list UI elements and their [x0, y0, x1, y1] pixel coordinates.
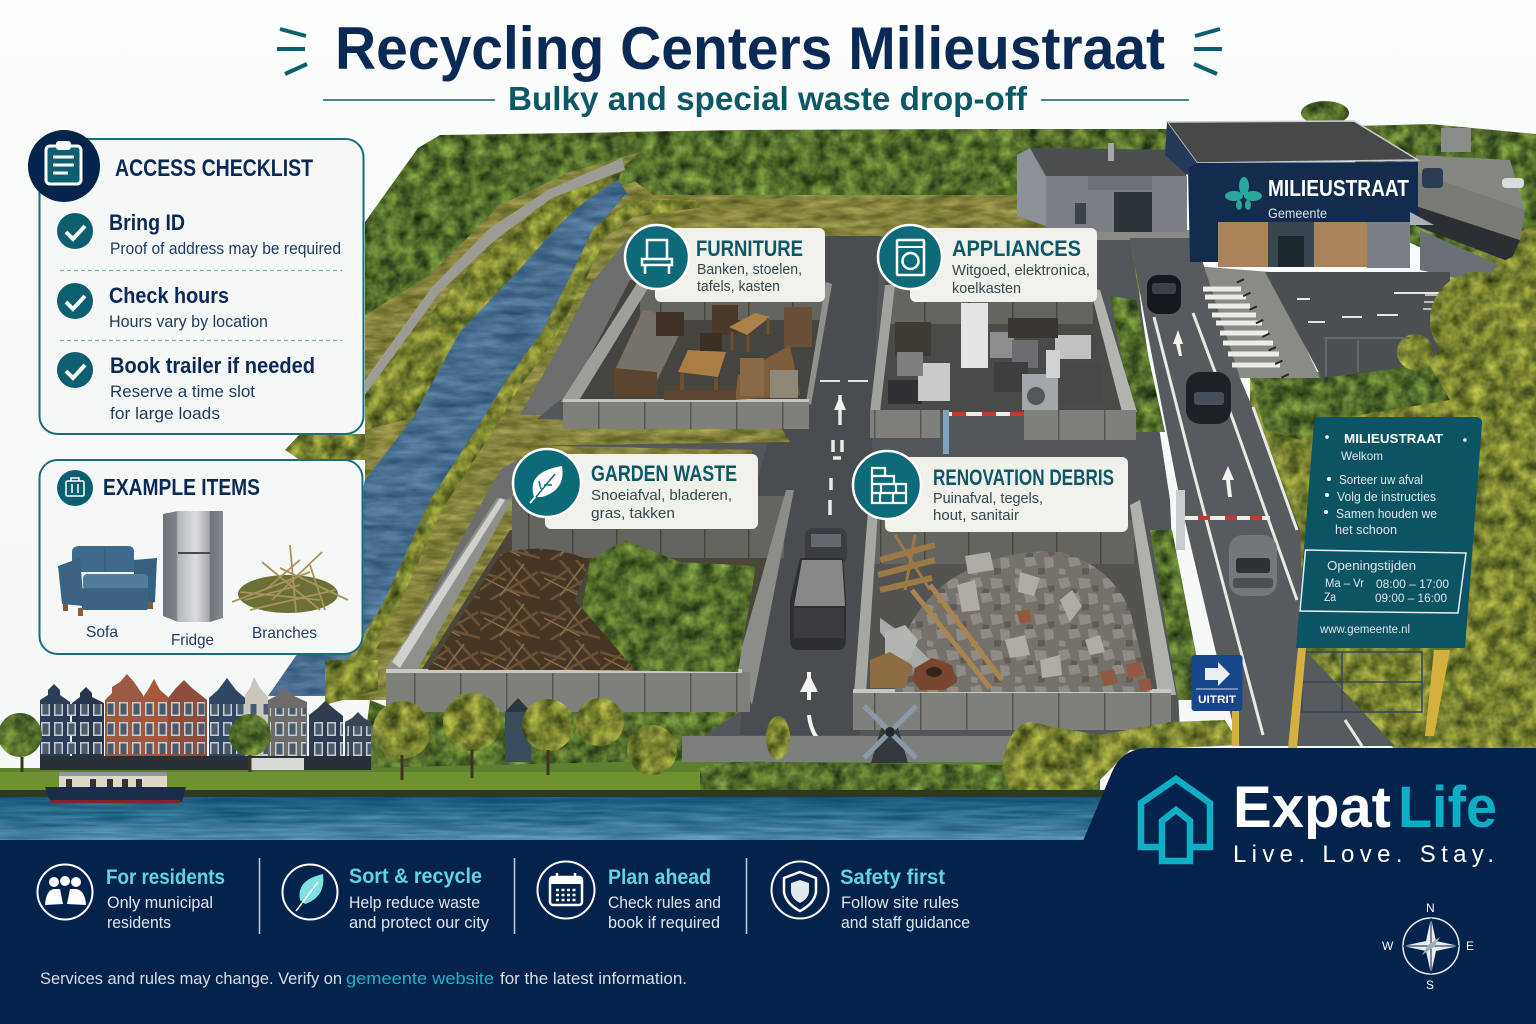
info sign: Ma – Vr — [1325, 578, 1364, 590]
example items heading: EXAMPLE ITEMS — [103, 474, 260, 500]
darker hedge — [1250, 366, 1450, 440]
rust ring — [912, 658, 957, 690]
tree trunks — [402, 750, 548, 780]
side building — [1030, 148, 1186, 177]
house in trees — [505, 698, 531, 762]
feature: plan ahead — [538, 862, 721, 932]
feature: for residents: residents — [107, 913, 171, 932]
feature: sort and recycle — [282, 864, 489, 932]
disclaimer: for the latest information. — [500, 969, 687, 988]
icon: chair — [625, 225, 689, 289]
red bricks — [1017, 609, 1152, 691]
label: renovation debris: Puinafval, tegels, — [933, 490, 1043, 507]
label: appliances: Witgoed, elektronica, — [952, 262, 1090, 279]
right road and parking — [1130, 128, 1536, 750]
tree backdrop — [360, 700, 740, 775]
lawn between bays — [500, 418, 790, 446]
label: garden waste: Snoeiafval, bladeren, — [591, 487, 732, 504]
info sign: het schoon — [1335, 523, 1397, 537]
meadow right of river — [325, 195, 1130, 700]
forecourt strip — [1040, 230, 1200, 240]
fence under sign — [1302, 652, 1422, 712]
label: renovation debris — [853, 451, 1128, 532]
item: check hours: Check hours — [109, 283, 229, 308]
icon: washing machine — [878, 225, 942, 289]
pallet — [878, 535, 935, 590]
label: appliances — [878, 225, 1097, 302]
icon: people — [38, 864, 92, 920]
feature: safety first: Follow site rules — [841, 893, 959, 912]
branches label: Branches — [252, 625, 317, 642]
item: bring ID: Bring ID — [109, 210, 185, 235]
town trees — [0, 713, 271, 757]
side wall — [1165, 122, 1197, 175]
compass: S — [1426, 978, 1434, 992]
icon: leaf — [513, 449, 581, 517]
fence — [1324, 338, 1410, 376]
compass: E — [1466, 939, 1474, 953]
wooden box — [870, 652, 912, 688]
compass — [1382, 901, 1474, 992]
icon: sofa — [58, 546, 157, 616]
right backdrop trees — [1352, 124, 1536, 300]
hedge along right bank — [326, 200, 700, 698]
icon: clipboard — [28, 130, 100, 202]
cinder blocks — [880, 618, 930, 672]
far parking — [1416, 155, 1525, 210]
feature: plan ahead: book if required — [608, 913, 720, 932]
item: book trailer — [57, 352, 315, 423]
logo wordmark — [1233, 775, 1497, 840]
brand block background — [1083, 748, 1536, 841]
aerial scene: land, river and trees — [268, 101, 1536, 745]
label: furniture: Banken, stoelen, — [697, 261, 802, 278]
feature: plan ahead: Check rules and — [608, 893, 721, 912]
facade — [1188, 162, 1418, 262]
road arrows — [1173, 330, 1234, 497]
car 3 — [1229, 535, 1277, 596]
base grass under site — [330, 175, 1180, 745]
appliance pile — [961, 303, 988, 368]
rubble heap — [895, 552, 1150, 692]
title: Recycling Centers Milieustraat — [335, 15, 1165, 82]
info sign: MILIEUSTRAAT — [1344, 431, 1443, 446]
roof — [1167, 121, 1418, 163]
bollards — [1240, 280, 1288, 382]
feature: sort and recycle: Sort & recycle — [349, 865, 482, 888]
trees below checklist — [285, 434, 365, 460]
building logo — [1225, 177, 1262, 210]
icon: bricks — [853, 451, 921, 519]
service path — [385, 238, 635, 672]
icon: shield — [772, 862, 828, 918]
info sign: Welkom — [1341, 449, 1383, 463]
info sign: Samen houden we — [1336, 507, 1437, 521]
river — [268, 180, 632, 696]
bay structure: garden waste — [385, 490, 794, 712]
bright grass — [0, 772, 1100, 794]
barrier — [1182, 516, 1270, 520]
info sign: Za — [1324, 592, 1337, 604]
sidewalk — [1195, 266, 1320, 378]
info sign: 09:00 – 16:00 — [1375, 593, 1447, 605]
top forest band — [620, 129, 1170, 205]
info sign: 08:00 – 17:00 — [1376, 579, 1449, 591]
sofa label: Sofa — [86, 624, 118, 641]
panel: access checklist — [28, 130, 364, 434]
far house — [1441, 128, 1471, 152]
entrance road — [1130, 238, 1395, 746]
panel: example items — [40, 460, 362, 654]
item: check hours: Hours vary by location — [109, 312, 268, 331]
bay structure: appliances — [870, 282, 1137, 454]
bay structure: furniture — [561, 277, 832, 429]
building subname: Gemeente — [1268, 205, 1327, 221]
checklist heading: ACCESS CHECKLIST — [115, 155, 313, 182]
car 2 — [1186, 372, 1231, 424]
item: bring ID: Proof of address may be required — [110, 239, 341, 258]
canal water — [0, 772, 1110, 841]
label: garden waste — [513, 449, 758, 529]
green waste pile — [572, 540, 756, 672]
label: garden waste: GARDEN WASTE — [591, 461, 737, 486]
houseboat — [45, 772, 186, 803]
exit sign — [1192, 655, 1242, 746]
label: furniture: FURNITURE — [696, 236, 803, 261]
tree row — [373, 693, 1240, 790]
disclaimer: gemeente website — [346, 969, 494, 988]
feature: safety first: and staff guidance — [841, 913, 970, 932]
trees right — [1250, 225, 1536, 750]
feature: for residents: For residents — [106, 866, 225, 889]
rubble blocks — [957, 552, 1105, 678]
logo: house icon — [1141, 779, 1210, 861]
far cars — [1422, 168, 1524, 188]
footer band — [0, 748, 1536, 1024]
branch pile — [428, 549, 635, 670]
logo wordmark: Life — [1398, 775, 1497, 840]
label: furniture: tafels, kasten — [697, 278, 780, 295]
compass: N — [1426, 901, 1435, 915]
logo wordmark: Expat — [1233, 775, 1391, 840]
furniture pile — [614, 310, 680, 385]
car 1 — [1147, 275, 1181, 314]
bay structure: renovation debris — [853, 500, 1176, 730]
feature: safety first — [772, 862, 970, 932]
item: book trailer: Book trailer if needed — [110, 353, 315, 378]
boom barrier — [946, 412, 1024, 416]
hedge below panels — [325, 660, 378, 705]
lane lines — [1154, 313, 1362, 746]
pad — [682, 736, 1012, 762]
item: check hours — [57, 283, 268, 331]
left forest — [365, 132, 640, 345]
lawn — [0, 760, 1100, 795]
feature: plan ahead: Plan ahead — [608, 866, 711, 889]
icon: branches — [232, 545, 348, 613]
backdrop tree crown — [1301, 101, 1349, 125]
windmill — [864, 706, 916, 763]
info sign: Openingstijden — [1327, 559, 1416, 573]
icon: items — [57, 470, 93, 506]
label: garden waste: gras, takken — [591, 505, 675, 522]
parking area — [1265, 272, 1450, 378]
parking trees — [1397, 255, 1536, 370]
canal houses — [0, 674, 371, 772]
cycle road — [365, 158, 625, 395]
icon: calendar — [538, 862, 594, 918]
compass: W — [1382, 939, 1394, 953]
lower pad, lawn and trees — [0, 693, 1240, 795]
info sign: www.gemeente.nl — [1319, 624, 1410, 636]
label: furniture — [625, 225, 825, 302]
feature: for residents: Only municipal — [107, 893, 213, 912]
central road darker — [740, 236, 880, 735]
building name: MILIEUSTRAAT — [1268, 175, 1409, 201]
item: bring ID — [57, 210, 341, 258]
title decorations — [277, 29, 1222, 100]
dutch house row — [40, 674, 371, 770]
road markings — [800, 381, 868, 760]
exit sign: UITRIT — [1198, 694, 1236, 706]
hedge — [700, 762, 1100, 795]
asphalt yard — [505, 236, 1180, 745]
item: book trailer: Reserve a time slot — [110, 382, 255, 401]
logo tagline: Live. Love. Stay. — [1233, 841, 1494, 868]
feature: safety first: Safety first — [840, 866, 945, 889]
white curved entrance arrow — [809, 672, 850, 760]
zebra crossing — [1203, 289, 1280, 365]
label: appliances: APPLIANCES — [952, 236, 1081, 261]
item: book trailer: for large loads — [110, 404, 220, 423]
subtitle: Bulky and special waste drop-off — [508, 80, 1028, 117]
feature: sort and recycle: and protect our city — [349, 913, 489, 932]
building: Milieustraat — [1017, 121, 1434, 268]
hedges along bays — [1110, 296, 1205, 700]
label: renovation debris: RENOVATION DEBRIS — [933, 465, 1114, 490]
info sign: Volg de instructies — [1337, 490, 1436, 504]
label: appliances: koelkasten — [952, 280, 1021, 297]
info sign: Sorteer uw afval — [1339, 473, 1423, 487]
disclaimer: Services and rules may change. Verify on — [40, 969, 342, 988]
info sign — [1288, 417, 1482, 748]
ladder — [912, 585, 1002, 688]
feature: sort and recycle: Help reduce waste — [349, 893, 480, 912]
sign posts — [1288, 648, 1450, 748]
van and car — [790, 528, 847, 650]
icon: leaf — [282, 864, 338, 920]
feature: for residents — [38, 864, 225, 932]
icon: fridge — [163, 511, 223, 622]
hedge between road and river — [365, 168, 622, 430]
fridge label: Fridge — [171, 632, 214, 649]
label: renovation debris: hout, sanitair — [933, 507, 1019, 524]
meadow beside road — [365, 152, 640, 395]
